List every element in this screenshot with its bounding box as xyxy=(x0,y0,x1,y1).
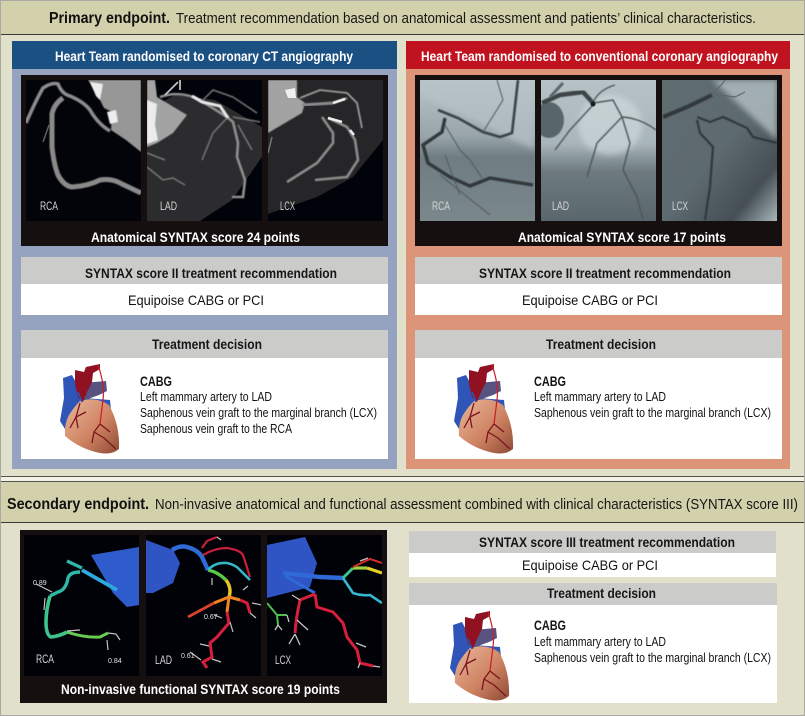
conventional angiography image strip xyxy=(415,75,782,246)
panel heading: coronary CT angiography: Heart Team randomised to coronary CT angiography xyxy=(55,48,353,64)
secondary endpoint header band: Secondary endpoint. xyxy=(7,496,149,513)
CABG text: CABG xyxy=(534,618,566,633)
anatomical SYNTAX score caption: Anatomical SYNTAX score 24 points xyxy=(91,229,300,245)
FFR model: RCA: 0.89 xyxy=(33,580,47,587)
CABG text: Left mammary artery to LAD xyxy=(534,634,666,649)
angiogram: RCA: RCA xyxy=(432,199,450,213)
SYNTAX score III recommendation xyxy=(409,531,776,577)
FFR model: LCX: LCX xyxy=(275,653,291,667)
SYNTAX score III recommendation: Equipoise CABG or PCI xyxy=(522,557,658,573)
SYNTAX score II recommendation xyxy=(415,257,782,315)
FFR model: LCX xyxy=(267,535,382,676)
FFR model: LAD xyxy=(146,535,262,676)
secondary treatment decision box xyxy=(409,583,777,703)
CABG text xyxy=(534,618,771,665)
icon: heart with grafts xyxy=(454,364,513,454)
primary endpoint header band: Treatment recommendation based on anatomical assessment and patients’ clinical characteristics. xyxy=(176,11,756,27)
treatment decision box: Treatment decision xyxy=(152,337,262,352)
SYNTAX score II recommendation: SYNTAX score II treatment recommendation xyxy=(479,266,731,281)
CABG text: Saphenous vein graft to the RCA xyxy=(140,421,292,436)
angiogram: RCA xyxy=(420,80,535,221)
CABG text: Left mammary artery to LAD xyxy=(534,389,666,404)
CABG text: CABG xyxy=(534,374,566,389)
FFR model: RCA: RCA xyxy=(36,652,54,666)
icon: heart with grafts xyxy=(60,364,119,454)
FFR model: LAD: 0.67 xyxy=(204,614,218,621)
FFR model: RCA xyxy=(24,535,139,676)
angiogram: LCX: LCX xyxy=(672,199,688,213)
angiogram: LCX xyxy=(662,80,777,221)
icon: heart with grafts xyxy=(450,611,509,700)
FFR model: LAD: LAD xyxy=(155,653,172,667)
secondary endpoint header band xyxy=(0,476,805,523)
treatment decision box xyxy=(21,330,388,459)
FFR model: LAD: 0.61 xyxy=(181,653,195,660)
SYNTAX score II recommendation: Equipoise CABG or PCI xyxy=(128,292,264,308)
primary endpoint header band xyxy=(0,0,805,35)
CT image: RCA xyxy=(26,80,141,221)
CABG text xyxy=(140,374,377,436)
secondary treatment decision box: Treatment decision xyxy=(547,586,656,601)
treatment decision box xyxy=(415,330,782,459)
CABG text: Saphenous vein graft to the marginal branch (LCX) xyxy=(140,405,377,420)
functional SYNTAX score caption: Non-invasive functional SYNTAX score 19 points xyxy=(61,681,340,697)
panel heading: coronary CT angiography xyxy=(12,41,397,69)
CT angiography image strip xyxy=(21,75,388,246)
primary endpoint header band: Primary endpoint. xyxy=(49,10,170,27)
CABG text: Left mammary artery to LAD xyxy=(140,389,272,404)
CT image: LAD xyxy=(147,80,262,221)
panel: Heart Team conventional coronary angiography xyxy=(406,41,790,469)
SYNTAX score II recommendation: SYNTAX score II treatment recommendation xyxy=(85,266,337,281)
CT image: LCX xyxy=(268,80,383,221)
CABG text: CABG xyxy=(140,374,172,389)
FFR model: RCA: 0.84 xyxy=(108,658,122,665)
CT image: LAD: LAD xyxy=(160,199,177,213)
panel: Heart Team coronary CT angiography xyxy=(12,41,397,469)
SYNTAX score II recommendation: Equipoise CABG or PCI xyxy=(522,292,658,308)
CABG text xyxy=(534,374,771,420)
anatomical SYNTAX score caption: Anatomical SYNTAX score 17 points xyxy=(518,229,726,245)
non-invasive functional image strip xyxy=(20,530,387,703)
treatment decision box: Treatment decision xyxy=(546,337,656,352)
panel heading: conventional coronary angiography xyxy=(406,41,790,69)
CT image: LCX: LCX xyxy=(280,199,295,213)
angiogram: LAD: LAD xyxy=(552,199,569,213)
angiogram: LAD xyxy=(534,80,656,221)
SYNTAX score III recommendation: SYNTAX score III treatment recommendation xyxy=(479,535,735,550)
SYNTAX score II recommendation xyxy=(21,257,388,315)
CT image: RCA: RCA xyxy=(40,199,58,213)
